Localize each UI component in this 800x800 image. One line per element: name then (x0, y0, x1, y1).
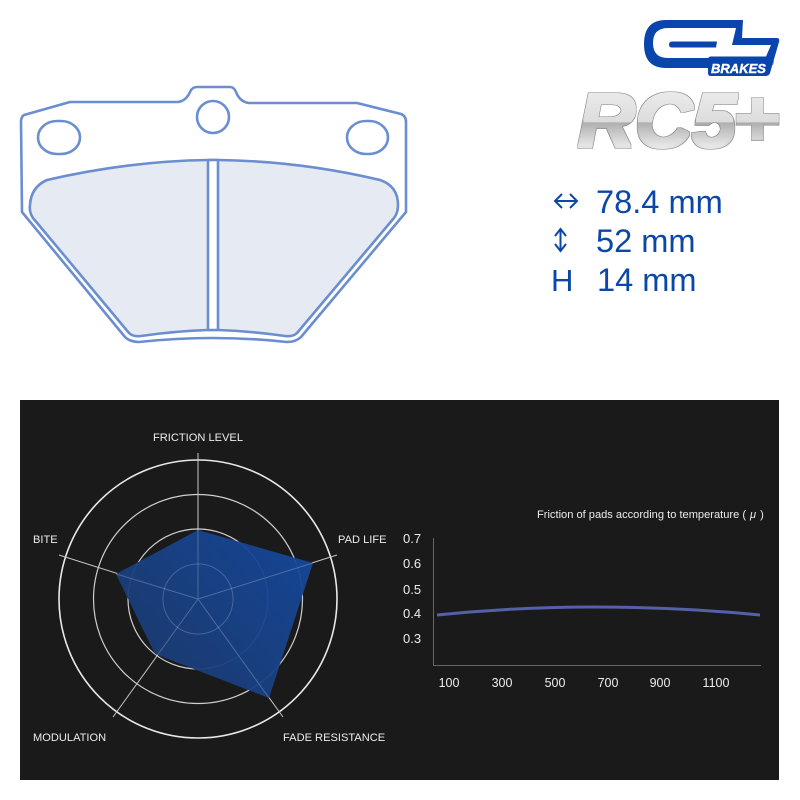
x axis labels: 100 (439, 676, 459, 690)
rings (59, 460, 337, 738)
height value: 52 mm (596, 222, 696, 259)
chart axes (434, 538, 761, 666)
BRAKES wordmark: BRAKES (711, 61, 766, 76)
right mounting slot (347, 121, 388, 154)
CL Brakes logo (644, 20, 779, 76)
x axis labels: 900 (650, 676, 670, 690)
axis labels: MODULATION (33, 732, 106, 744)
x axis labels: 700 (598, 676, 618, 690)
RC5 lettering: RC5 (578, 79, 738, 164)
thickness value: 14 mm (597, 261, 697, 298)
axis labels: PAD LIFE (338, 534, 386, 546)
y axis labels: 0.5 (403, 582, 421, 597)
y axis labels (403, 531, 421, 646)
RC5+ product logo (578, 74, 779, 164)
radar data polygon (116, 530, 313, 698)
friction material (30, 160, 398, 336)
icon: width arrow (555, 194, 577, 208)
icon: height arrow (555, 229, 566, 251)
centre groove (208, 160, 218, 330)
axis labels (33, 432, 386, 744)
axis labels: FADE RESISTANCE (283, 732, 385, 744)
width value: 78.4 mm (596, 183, 723, 220)
logo body (644, 20, 779, 76)
axis labels: FRICTION LEVEL (153, 432, 243, 444)
axes (59, 453, 337, 717)
logo white letterform (653, 28, 771, 58)
faint inner ring and spokes over polygon (116, 530, 313, 698)
chart title: Friction of pads according to temperature ( μ ) (537, 509, 764, 521)
centre hole (197, 101, 229, 133)
friction curve (437, 607, 760, 615)
registered mark: ® (769, 59, 775, 67)
plus sign: + (733, 74, 779, 162)
axis labels: BITE (33, 534, 58, 546)
friction line chart (403, 509, 764, 690)
x axis labels (439, 676, 729, 690)
x axis labels: 300 (492, 676, 512, 690)
icon: thickness H: H (551, 263, 573, 298)
x axis labels: 1100 (703, 676, 729, 690)
brake pad drawing (21, 87, 406, 342)
radar chart (33, 432, 386, 744)
y axis labels: 0.6 (403, 556, 421, 571)
dark performance panel (20, 400, 779, 780)
pad backing plate outline (21, 87, 406, 342)
logo slot (669, 42, 717, 48)
y axis labels: 0.7 (403, 531, 421, 546)
pad dimensions (551, 183, 723, 298)
y axis labels: 0.4 (403, 606, 421, 621)
left mounting slot (38, 121, 80, 154)
x axis labels: 500 (545, 676, 565, 690)
y axis labels: 0.3 (403, 631, 421, 646)
